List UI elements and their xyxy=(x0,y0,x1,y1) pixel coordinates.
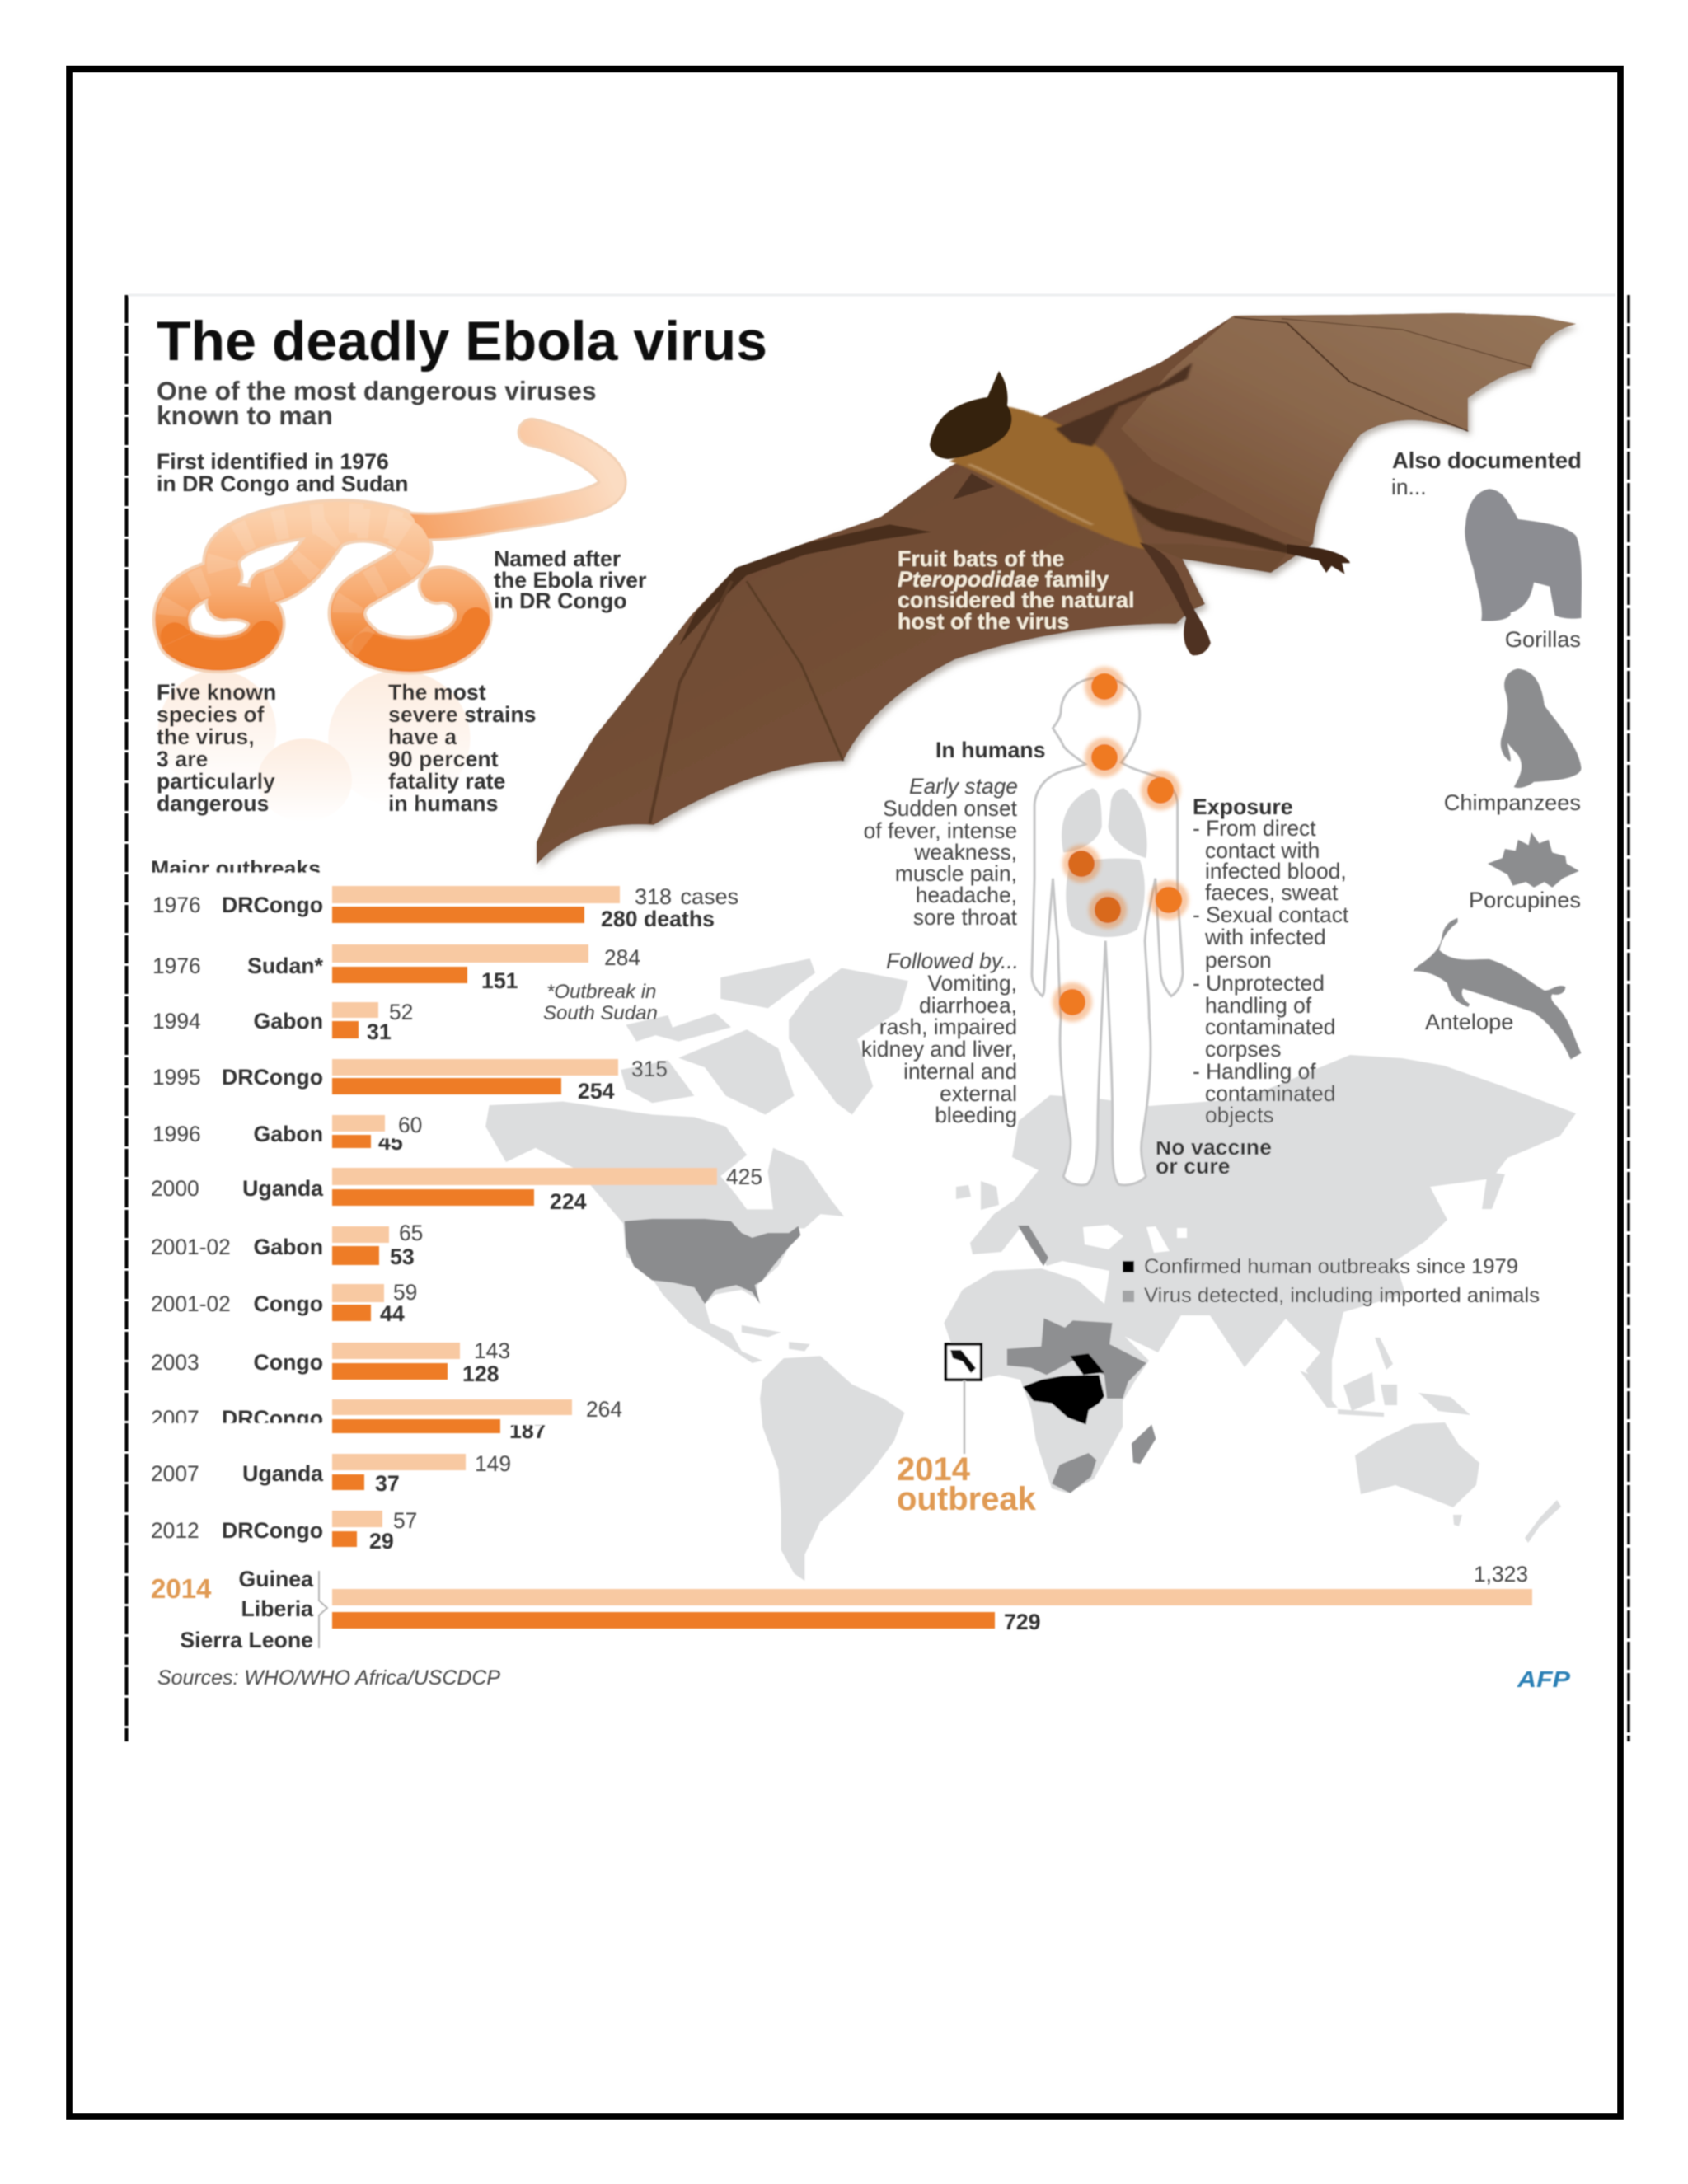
exposure list: contact with xyxy=(1205,838,1320,863)
symptom hot spots xyxy=(1053,667,1189,1022)
row: 1995 DRCongo: 315 xyxy=(631,1057,668,1081)
AFP logo: AFP xyxy=(1517,1666,1570,1692)
virus illustration xyxy=(158,432,612,822)
bat caption: considered the natural xyxy=(898,588,1134,612)
footnote: outbreak in South Sudan: *Outbreak in xyxy=(546,981,656,1003)
bat right wing bones xyxy=(1234,317,1531,431)
row: 2001-02 Congo: 2001-02 xyxy=(151,1291,231,1316)
bar chart: major outbreaks xyxy=(147,884,1532,1652)
row: 2001-02 Congo xyxy=(151,1280,417,1326)
heading: major outbreaks: Major outbreaks xyxy=(151,856,321,881)
virus fact: five species: species of xyxy=(157,702,265,727)
row: 2012 DRCongo xyxy=(151,1508,417,1554)
virus fact: five species: Five known xyxy=(157,680,276,705)
exposure list xyxy=(1193,794,1349,1127)
later symptoms: external xyxy=(940,1081,1017,1106)
icon: porcupine xyxy=(1488,832,1579,888)
row: 2014 current outbreak: Guinea xyxy=(239,1567,314,1591)
label: porcupines: Porcupines xyxy=(1469,887,1581,912)
virus fact: five species: particularly xyxy=(157,769,275,794)
row: 1994 Gabon: 52 xyxy=(389,1000,413,1024)
row: 2007 Uganda: 2007 xyxy=(151,1461,199,1486)
row: 1976 Sudan: 284 xyxy=(604,945,640,970)
exposure list: - Unprotected xyxy=(1193,971,1325,996)
icon: chimpanzee xyxy=(1501,668,1581,788)
later symptoms: bleeding xyxy=(935,1103,1017,1127)
virus fact: name origin xyxy=(494,546,646,613)
heading: also documented in xyxy=(1391,448,1582,499)
subtitle: known to man xyxy=(157,401,333,430)
early stage symptoms: Sudden onset xyxy=(883,796,1018,821)
row: 1976 DRCongo: 318 cases xyxy=(635,884,738,909)
map: Africa xyxy=(944,1268,1156,1493)
exposure list: corpses xyxy=(1205,1037,1281,1062)
early stage symptoms: weakness, xyxy=(913,840,1017,865)
virus body xyxy=(171,432,612,655)
virus fact: fatality rate: in humans xyxy=(388,791,498,816)
map: South Africa xyxy=(1052,1453,1096,1493)
row: 1976 Sudan: Sudan* xyxy=(247,954,324,978)
virus reflection xyxy=(158,671,470,822)
later symptoms: diarrhoea, xyxy=(919,993,1017,1018)
bat wing bones xyxy=(649,473,995,823)
row: 2003 Congo: 143 xyxy=(474,1338,510,1363)
exposure list: - Sexual contact xyxy=(1193,902,1349,927)
row: 1976 Sudan xyxy=(152,944,658,1024)
virus fact: name origin: Named after xyxy=(494,546,621,571)
map: 2014 outbreak inset xyxy=(946,1344,981,1380)
body outline xyxy=(1032,677,1183,1185)
row: 2012 DRCongo: DRCongo xyxy=(222,1518,323,1543)
map: Italy highlighted xyxy=(1018,1226,1048,1266)
row: 2003 Congo: 128 xyxy=(462,1361,499,1386)
row: 1996 Gabon xyxy=(152,1113,422,1155)
virus fact: five species: 3 are xyxy=(157,747,208,771)
row: 2000 Uganda xyxy=(151,1165,762,1214)
map: Asia-Pacific islands xyxy=(1300,1338,1561,1543)
map: African countries with detected virus xyxy=(1007,1318,1146,1399)
right wing lighter membrane xyxy=(1121,313,1576,544)
exposure list: infected blood, xyxy=(1205,859,1347,883)
row: 2000 Uganda: Uganda xyxy=(242,1176,324,1201)
virus fact: five species: the virus, xyxy=(157,724,255,749)
virus fact: fatality rate: have a xyxy=(388,724,457,749)
row: 2001-02 Congo: 59 xyxy=(393,1280,417,1305)
later symptoms xyxy=(861,949,1019,1127)
virus fact: five species: dangerous xyxy=(157,791,269,816)
left panel edge xyxy=(125,295,129,1741)
row: 2014 current outbreak: 2014 xyxy=(151,1573,212,1604)
virus fact: fatality rate xyxy=(388,680,537,816)
row: 2007 DRCongo: DRCongo xyxy=(222,1406,323,1431)
row: 1976 DRCongo xyxy=(152,884,738,931)
row: 1994 Gabon: 31 xyxy=(367,1019,392,1044)
heading: in humans: In humans xyxy=(935,738,1045,762)
map: African countries with confirmed outbreaks xyxy=(1023,1375,1104,1425)
exposure list: - From direct xyxy=(1193,816,1316,841)
row: 2001-02 Gabon: 53 xyxy=(390,1244,415,1269)
row: 2003 Congo: Congo xyxy=(254,1350,323,1375)
sources credit: Sources: WHO/WHO Africa/USCDCP xyxy=(157,1666,500,1690)
map legend xyxy=(1123,1255,1540,1307)
row: 1995 DRCongo: DRCongo xyxy=(222,1065,323,1090)
early stage symptoms: of fever, intense xyxy=(864,818,1017,843)
heading: also documented in: in... xyxy=(1391,475,1427,499)
row: 1976 DRCongo: 280 deaths xyxy=(601,907,715,931)
label: gorillas: Gorillas xyxy=(1505,626,1581,652)
row: 2007 DRCongo xyxy=(147,1397,622,1443)
footnote: outbreak in South Sudan xyxy=(543,981,658,1024)
exposure list: Exposure xyxy=(1193,794,1293,819)
no vaccine note: No vaccine xyxy=(1156,1135,1272,1160)
row: 2014 current outbreak: Sierra Leone xyxy=(180,1628,313,1652)
virus fact: fatality rate: fatality rate xyxy=(388,769,505,794)
label: chimpanzees: Chimpanzees xyxy=(1444,790,1581,815)
row: 2000 Uganda: 224 xyxy=(550,1189,587,1214)
later symptoms: kidney and liver, xyxy=(861,1037,1017,1062)
later symptoms: Vomiting, xyxy=(927,971,1017,996)
bat shoulder shading xyxy=(1056,363,1192,447)
early stage symptoms: sore throat xyxy=(913,905,1018,930)
row: 2001-02 Gabon: 65 xyxy=(399,1221,423,1245)
virus fact: first identified xyxy=(157,449,408,496)
map legend: Virus detected, including imported animals xyxy=(1144,1284,1540,1307)
exposure list: - Handling of xyxy=(1193,1059,1316,1084)
2014 outbreak map label xyxy=(897,1451,1037,1517)
row: 2001-02 Gabon: 2001-02 xyxy=(151,1235,231,1259)
virus fact: five species xyxy=(157,680,276,816)
later symptoms: Followed by... xyxy=(886,949,1019,973)
bat body fur and shading xyxy=(950,363,1350,655)
row: 2000 Uganda: 425 xyxy=(726,1165,762,1189)
exposure list: objects xyxy=(1205,1103,1274,1127)
row: 1995 DRCongo: 1995 xyxy=(152,1065,201,1090)
virus fact: name origin: in DR Congo xyxy=(494,588,627,613)
lungs and organs xyxy=(1062,788,1147,937)
row: 2012 DRCongo: 2012 xyxy=(151,1518,199,1543)
later symptoms: internal and xyxy=(903,1059,1017,1084)
early stage symptoms xyxy=(864,774,1018,930)
row: 2001-02 Congo: 44 xyxy=(380,1301,405,1326)
row: 2014 current outbreak: 729 xyxy=(1004,1610,1041,1634)
row: 2000 Uganda: 2000 xyxy=(151,1176,199,1201)
virus fact: first identified: First identified in 1976 xyxy=(157,449,389,474)
early stage symptoms: Early stage xyxy=(909,774,1018,799)
early stage symptoms: headache, xyxy=(916,883,1017,907)
later symptoms: rash, impaired xyxy=(879,1015,1017,1039)
heading: also documented in: Also documented xyxy=(1392,448,1582,473)
row: 1976 DRCongo: DRCongo xyxy=(222,893,323,917)
early stage symptoms: muscle pain, xyxy=(895,861,1017,886)
exposure list: faeces, sweat xyxy=(1205,880,1339,905)
row: 2001-02 Gabon xyxy=(151,1221,423,1269)
row: 1995 DRCongo xyxy=(152,1057,668,1104)
map: South Sudan xyxy=(1070,1353,1104,1375)
row: 1994 Gabon xyxy=(152,1000,413,1044)
no vaccine note xyxy=(1152,1132,1272,1179)
bat caption: host of the virus xyxy=(898,609,1069,634)
row: 1996 Gabon: Gabon xyxy=(253,1122,323,1146)
virus fact: fatality rate: The most xyxy=(388,680,486,705)
row: 2007 Uganda xyxy=(151,1451,511,1496)
row: 2012 DRCongo: 29 xyxy=(369,1529,394,1554)
infographic panel xyxy=(127,295,1629,1741)
world map xyxy=(485,958,1576,1581)
row: 1995 DRCongo: 254 xyxy=(578,1079,615,1104)
map: North America xyxy=(485,958,844,1363)
exposure list: person xyxy=(1205,948,1272,972)
bat caption xyxy=(898,546,1134,634)
virus fact: fatality rate: severe strains xyxy=(388,702,537,727)
2014 outbreak map label: 2014 xyxy=(897,1451,971,1488)
bat head xyxy=(930,371,1011,459)
row: 2007 DRCongo: 187 xyxy=(509,1418,546,1443)
2014 outbreak map label: outbreak xyxy=(897,1481,1037,1517)
virus lobe bulk xyxy=(175,621,476,655)
row: 1994 Gabon: Gabon xyxy=(253,1009,323,1033)
map: Greenland xyxy=(789,968,908,1115)
row: 2003 Congo xyxy=(151,1338,510,1386)
row: 2001-02 Gabon: Gabon xyxy=(253,1235,323,1259)
virus fact: fatality rate: 90 percent xyxy=(388,747,499,771)
label: antelope: Antelope xyxy=(1425,1009,1513,1034)
map legend: Confirmed human outbreaks since 1979 xyxy=(1144,1255,1518,1278)
bat belly highlight xyxy=(968,464,1092,525)
bat rear leg and foot xyxy=(1140,542,1211,655)
icon: antelope xyxy=(1413,918,1581,1059)
human body diagram xyxy=(1032,667,1189,1185)
map: South America xyxy=(760,1356,904,1581)
row: 2014 current outbreak xyxy=(151,1562,1532,1652)
row: 2007 DRCongo: 264 xyxy=(586,1397,622,1422)
row: 1996 Gabon: 45 xyxy=(378,1130,403,1155)
exposure list: with infected xyxy=(1204,925,1326,949)
title: The deadly Ebola virus xyxy=(157,310,767,373)
bat shadow xyxy=(539,317,1578,869)
subtitle xyxy=(157,376,597,430)
bat forearm and claws xyxy=(1287,544,1350,574)
map: United States highlighted xyxy=(625,1219,800,1304)
bat wings and body outline xyxy=(537,313,1576,865)
row: 2014 current outbreak: 1,323 xyxy=(1474,1562,1528,1586)
map: inset leader line xyxy=(964,1380,965,1454)
row: 2003 Congo: 2003 xyxy=(151,1350,199,1375)
row: 2007 Uganda: 149 xyxy=(475,1451,511,1476)
row: 1996 Gabon: 60 xyxy=(398,1113,422,1137)
row: 1976 Sudan: 1976 xyxy=(152,954,201,978)
map: Eurasia xyxy=(956,1055,1576,1401)
row: 1976 Sudan: 151 xyxy=(481,968,518,993)
row: 2007 Uganda: Uganda xyxy=(242,1461,324,1486)
bat caption: Fruit bats of the xyxy=(898,546,1064,571)
icon: gorilla xyxy=(1465,489,1582,621)
row: 2001-02 Congo: Congo xyxy=(254,1291,323,1316)
virus fact: first identified: in DR Congo and Sudan xyxy=(157,471,408,496)
exposure list: contaminated xyxy=(1205,1015,1335,1039)
bat flank shading xyxy=(1124,489,1297,554)
exposure list: contaminated xyxy=(1205,1081,1335,1106)
row: 2012 DRCongo: 57 xyxy=(393,1508,417,1533)
subtitle: One of the most dangerous viruses xyxy=(157,376,597,405)
no vaccine note: or cure xyxy=(1156,1154,1230,1179)
row: 1996 Gabon: 1996 xyxy=(152,1122,201,1146)
virus fact: name origin: the Ebola river xyxy=(494,568,646,593)
row: 2007 Uganda: 37 xyxy=(375,1471,400,1496)
top edge of panel xyxy=(129,293,1615,297)
bat membrane between leg and arm xyxy=(1145,544,1287,573)
map: inland seas xyxy=(1083,1225,1187,1253)
row: 1994 Gabon: 1994 xyxy=(152,1009,201,1033)
fruit bat illustration xyxy=(537,313,1578,869)
footnote: outbreak in South Sudan: South Sudan xyxy=(543,1002,658,1024)
exposure list: handling of xyxy=(1205,993,1312,1018)
virus ridges xyxy=(171,518,414,648)
row: 2014 current outbreak: Liberia xyxy=(241,1596,314,1621)
row: 2007 DRCongo: 2007 xyxy=(151,1406,199,1431)
bat caption: Pteropodidae family xyxy=(898,567,1109,592)
map: Madagascar xyxy=(1132,1425,1156,1464)
row: 1976 DRCongo: 1976 xyxy=(152,893,201,917)
right panel edge xyxy=(1627,295,1630,1741)
